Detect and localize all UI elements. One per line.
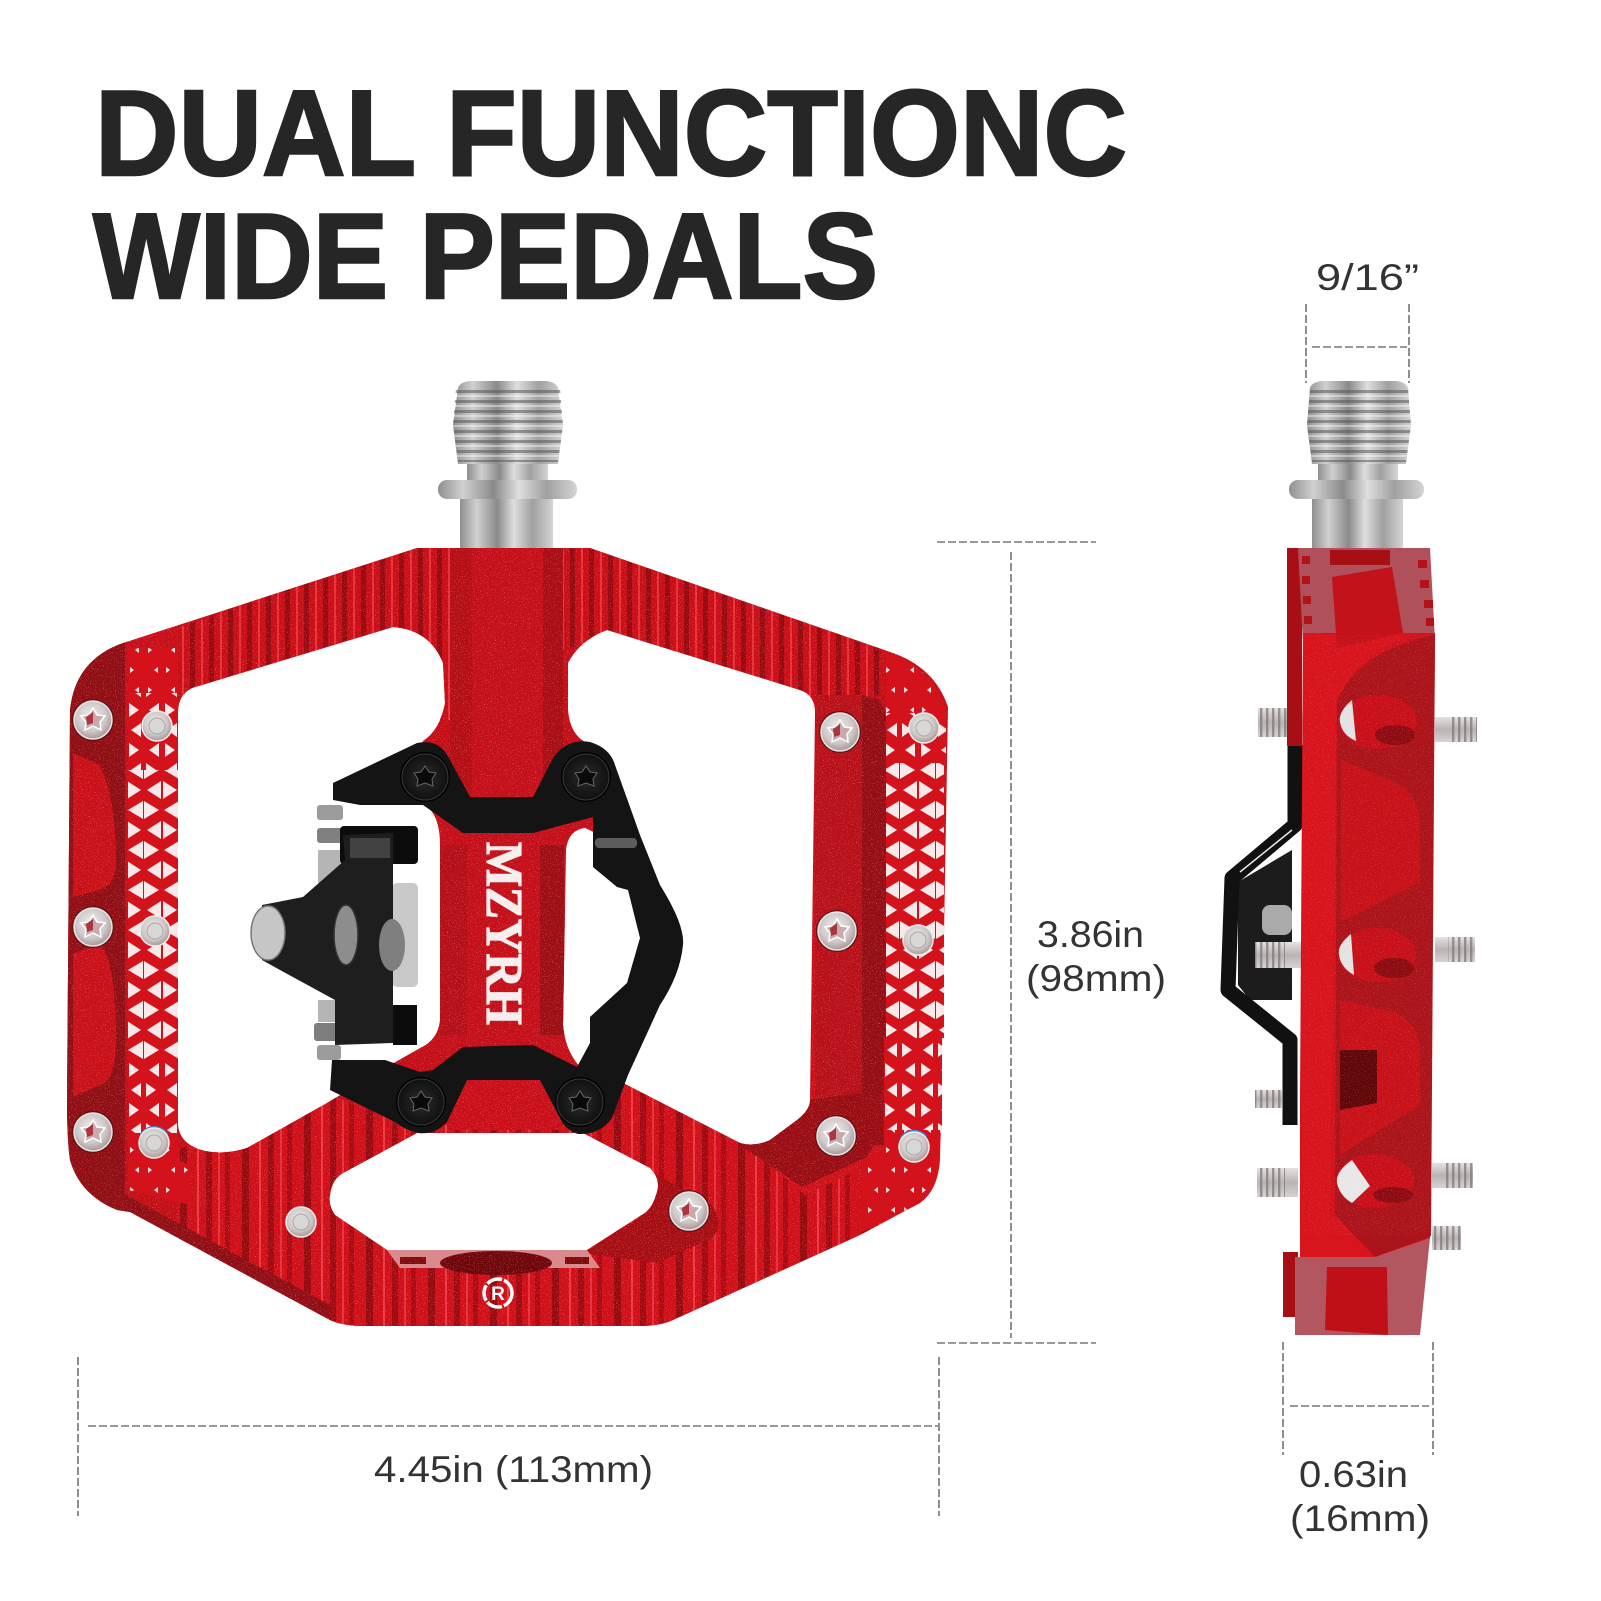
dimension: 9/16 inch <box>1306 257 1419 383</box>
cleat mechanism <box>251 805 418 1060</box>
dimension: pedal height 3.86in: (98mm) <box>1026 958 1166 999</box>
pedal body <box>60 540 960 1330</box>
right triangle grip band <box>862 652 946 1232</box>
ribbed surface bottom <box>178 1075 885 1330</box>
side top face <box>1298 548 1435 645</box>
side back strips <box>1283 548 1302 1317</box>
dimension: pedal height 3.86in <box>937 542 1166 1343</box>
title: WIDE PEDALS <box>93 188 878 324</box>
registered mark: R <box>491 1284 505 1305</box>
title <box>93 65 1127 324</box>
side axle <box>1289 381 1424 551</box>
left triangle grip band <box>128 648 190 1205</box>
dimension: pedal width 4.45in: 4.45in (113mm) <box>374 1449 653 1490</box>
lower centre block <box>454 1125 559 1130</box>
side studs <box>1255 708 1477 1250</box>
small slot left <box>400 1257 426 1264</box>
black clip highlight <box>595 838 637 848</box>
side darker face <box>1335 635 1435 1257</box>
dimension: pedal thickness 0.63in: (16mm) <box>1290 1498 1430 1539</box>
lower screw pocket <box>583 1173 718 1263</box>
centre bridge <box>563 910 565 1038</box>
dimension: 9/16 inch: 9/16” <box>1316 257 1419 298</box>
axle spindle <box>438 381 577 551</box>
side main body <box>1300 633 1435 1260</box>
side grain <box>1303 635 1435 1235</box>
registered mark <box>484 1279 512 1307</box>
side view pedal <box>1228 381 1477 1335</box>
small slot right <box>565 1257 589 1264</box>
dimension: pedal height 3.86in: 3.86in <box>1037 914 1144 955</box>
dimension: pedal thickness 0.63in: 0.63in <box>1299 1454 1408 1495</box>
side recess upper <box>1341 760 1420 920</box>
ribbed surfaces top <box>178 540 885 720</box>
black binding clip <box>330 741 683 1134</box>
side bright edge <box>1300 633 1420 1260</box>
oval hole surround <box>387 1250 600 1268</box>
large pins <box>72 699 861 1232</box>
left bevel <box>60 630 330 1330</box>
side recess slot <box>1340 1050 1377 1110</box>
side teeth <box>1302 556 1434 626</box>
centre column <box>450 540 472 810</box>
side recess lower <box>1340 1000 1420 1155</box>
title: DUAL FUNCTIONC <box>95 65 1127 201</box>
front view pedal <box>60 381 960 1330</box>
small pins <box>139 711 939 1237</box>
side bottom window <box>1325 1267 1388 1335</box>
dimension: pedal thickness 0.63in <box>1283 1342 1433 1539</box>
left recess upper <box>73 753 116 897</box>
MZYRH logo: MZYRH <box>475 842 532 1025</box>
right inner bar <box>815 695 865 1140</box>
oval hole <box>440 1251 552 1275</box>
side bottom face <box>1295 1238 1430 1335</box>
side holes <box>1336 695 1417 1208</box>
black clip screws <box>396 752 611 1127</box>
right corner pocket <box>745 1093 874 1187</box>
metallic grain <box>60 540 960 1330</box>
side top window <box>1332 567 1403 648</box>
side top slot <box>1330 550 1390 565</box>
left recess lower <box>73 945 116 1097</box>
side binding clip <box>1228 745 1295 1125</box>
